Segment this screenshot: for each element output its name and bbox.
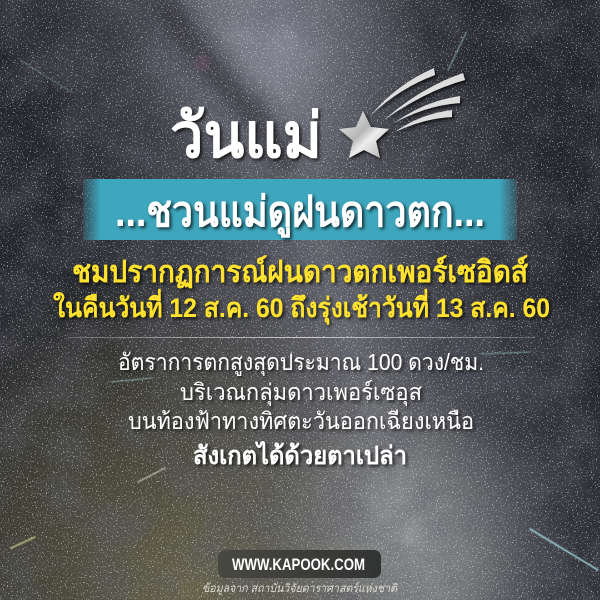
- website badge: [218, 550, 381, 578]
- details text block: สังเกตได้ด้วยตาเปล่า: [193, 440, 407, 470]
- banner text: ...ชวนแม่ดูฝนดาวตก...: [115, 188, 485, 238]
- banner: [83, 179, 517, 240]
- details text block: อัตราการตกสูงสุดประมาณ 100 ดวง/ชม.: [118, 349, 484, 376]
- star trails: [371, 68, 465, 132]
- details text block: บริเวณกลุ่มดาวเพอร์เซอุส: [180, 379, 422, 406]
- yellow heading: [53, 255, 550, 325]
- details text block: บนท้องฟ้าทางทิศตะวันออกเฉียงเหนือ: [128, 408, 474, 434]
- icon: shooting star: [339, 68, 465, 158]
- title: วันแม่: [170, 102, 322, 171]
- star: [339, 111, 389, 158]
- yellow heading: ชมปรากฏการณ์ฝนดาวตกเพอร์เซอิดส์: [72, 255, 529, 289]
- details text block: [118, 349, 484, 470]
- website badge: WWW.KAPOOK.COM: [232, 555, 365, 574]
- yellow heading: ในคืนวันที่ 12 ส.ค. 60 ถึงรุ่งเช้าวันที่ 13 ส.ค. 60: [53, 288, 550, 325]
- source caption: ข้อมูลจาก สถาบันวิจัยดาราศาสตร์แห่งชาติ: [202, 581, 398, 595]
